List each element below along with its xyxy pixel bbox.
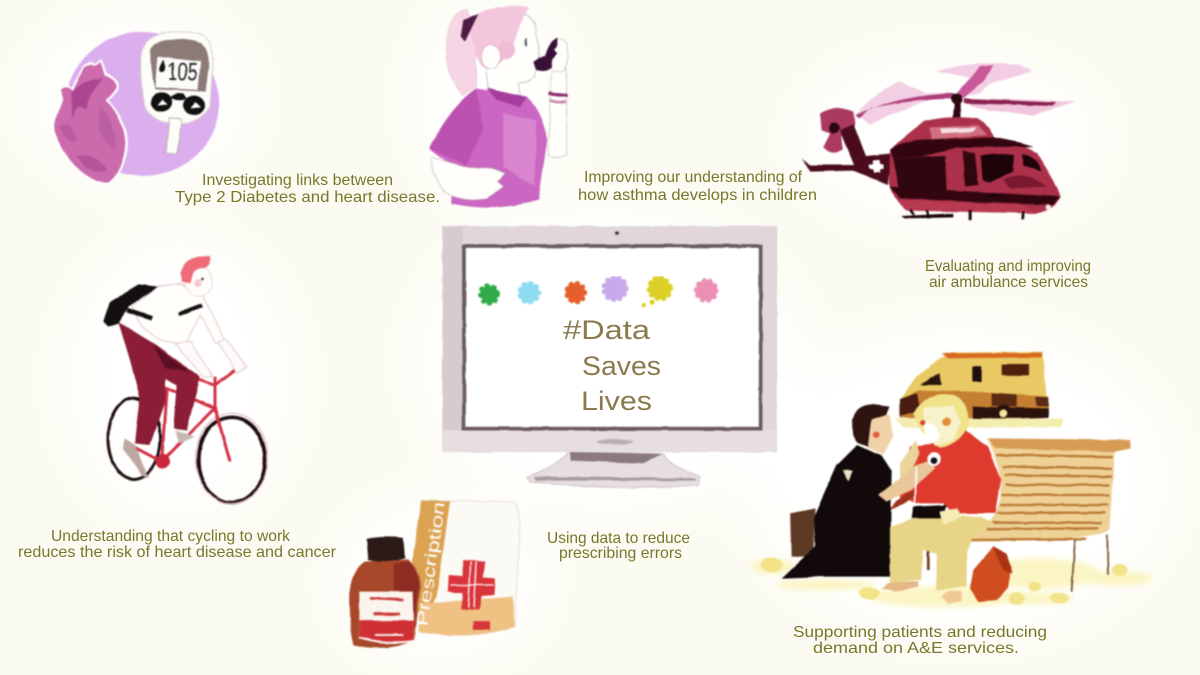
body: [889, 117, 1061, 213]
caption: cycling: [18, 528, 337, 561]
caption: air ambulance: [925, 258, 1091, 291]
paramedic body: [782, 445, 892, 578]
shirt: [429, 88, 547, 208]
monitor screen: [469, 250, 756, 425]
monitor hashtag text: [563, 315, 661, 416]
caption: A&E: [793, 624, 1047, 657]
skids: [902, 213, 953, 218]
paramedic head: [860, 412, 893, 455]
illustration: paramedic and patient on bench: [750, 352, 1153, 607]
caption: prescribing: Using data to reduce: [547, 530, 690, 547]
leaves: [761, 558, 1128, 604]
face: [480, 11, 539, 98]
rotor blades: [855, 63, 1077, 125]
reflective badge: [843, 470, 853, 482]
white cross: [869, 159, 884, 173]
scrunchie: [461, 14, 478, 42]
illustration: heart and glucose meter: [52, 32, 219, 185]
caption: A&E: Supporting patients and reducing: [793, 624, 1047, 641]
caption: air ambulance: Evaluating and improving: [925, 258, 1091, 275]
caption: cycling: Understanding that cycling to work: [51, 528, 291, 545]
illustration: computer monitor: [443, 227, 777, 488]
hand: [552, 39, 567, 72]
bag label text: Prescription: [412, 501, 449, 627]
patient hand and shoes: [940, 508, 962, 525]
caption: diabetes and heart disease: Type 2 Diabetes and heart disease.: [175, 189, 440, 206]
caption: diabetes and heart disease: Investigating links between: [202, 172, 393, 189]
tail boom: [802, 124, 892, 185]
ground wash: [750, 558, 1153, 607]
bench: [928, 438, 1131, 592]
rider legs: [118, 322, 200, 445]
icon: heart: [52, 58, 128, 185]
windows: [981, 154, 1014, 183]
hair: [467, 6, 528, 69]
icon: glucose meter: [140, 32, 213, 154]
lower hull: [897, 200, 1037, 213]
illustration: medicine bottle and prescription bag: [349, 501, 520, 647]
illustration: cyclist: [103, 256, 268, 504]
arm on hip: [431, 157, 505, 200]
monitor stand: [527, 452, 700, 488]
caption: asthma: how asthma develops in children: [578, 187, 817, 204]
ambulance: [895, 352, 1063, 427]
paramedic arm and stethoscope: [878, 460, 935, 502]
rider arms: [175, 342, 213, 377]
shoes: [123, 438, 148, 478]
bike frame: [130, 370, 235, 462]
rider head: [184, 266, 212, 296]
paramedic bag behind: [791, 508, 815, 557]
medicine bottle: [349, 536, 420, 647]
mast and hub: [953, 100, 961, 120]
caption: air ambulance: air ambulance services: [929, 274, 1088, 291]
icon: glucose meter: 105: [168, 59, 198, 87]
backpack: [103, 284, 158, 327]
monitor hashtag text: Lives: [581, 386, 652, 416]
prescription bag: [412, 501, 520, 636]
illustration: air ambulance helicopter: [802, 63, 1077, 221]
monitor frame: [443, 227, 777, 452]
red rucksack: [970, 547, 1012, 602]
purple circle: [66, 32, 219, 176]
caption: A&E: demand on A&E services.: [813, 640, 1019, 657]
caption: asthma: [578, 169, 817, 204]
caption: prescribing: prescribing errors: [559, 545, 682, 562]
bracelets: [549, 93, 567, 95]
ponytail: [446, 10, 477, 95]
caption: prescribing: [547, 530, 690, 562]
lower dark band: [890, 187, 1060, 205]
illustration: girl with inhaler: [429, 6, 567, 208]
monitor hashtag text: Saves: [582, 351, 661, 381]
monitor hashtag text: #Data: [563, 315, 651, 345]
dark upper band: [890, 137, 1033, 158]
caption: cycling: reduces the risk of heart disease and cancer: [18, 544, 337, 561]
patient jumper: [900, 430, 1001, 513]
arm raised: [548, 68, 567, 157]
inhaler: [533, 37, 557, 71]
rider torso: [132, 283, 225, 345]
patient head: [913, 394, 969, 448]
coloured data blobs: [481, 278, 715, 308]
red cross: [447, 560, 495, 611]
caption: asthma: Improving our understanding of: [584, 169, 803, 186]
caption: diabetes and heart disease: [175, 172, 440, 206]
tail rotor: [820, 108, 855, 153]
roof markings: [930, 125, 987, 139]
patient trousers: [890, 513, 993, 590]
bike wheels: [108, 398, 268, 504]
